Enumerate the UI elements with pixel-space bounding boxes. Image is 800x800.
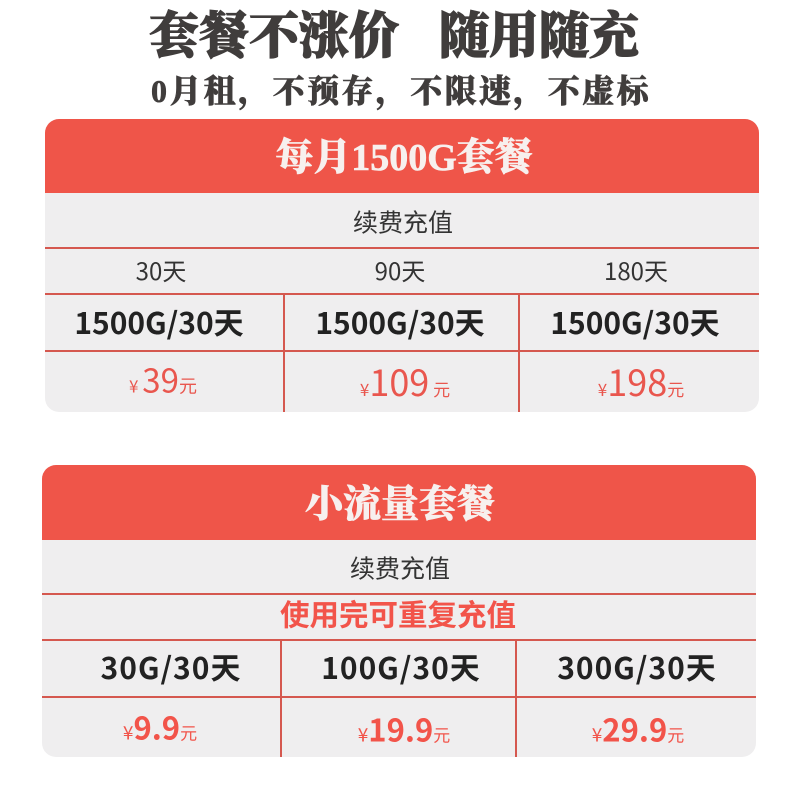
panel: monthly 1500G plan <box>45 119 759 412</box>
title: 套餐不涨价 随用随充 <box>149 8 639 64</box>
price 19.9: ¥19.9元 <box>358 706 450 750</box>
duration: 180 days: 180天 <box>604 252 668 287</box>
plan 300G: 300G/30天 <box>557 644 717 688</box>
duration: 90 days: 90天 <box>375 252 425 287</box>
price 39: ¥ 39元 <box>129 354 197 402</box>
plan 3: 1500G/30天 <box>550 299 720 343</box>
panel header <box>45 119 759 193</box>
plan 30G: 30G/30天 <box>101 644 241 688</box>
subtitle: 0月租，不预存，不限速，不虚标 <box>151 73 651 109</box>
duration: 30 days: 30天 <box>136 252 186 287</box>
panel heading: 小流量套餐 <box>305 484 495 526</box>
plan 2: 1500G/30天 <box>315 299 485 343</box>
refill note: 使用完可重复充值 <box>280 592 516 634</box>
renewal label: 续费充值 <box>353 204 453 240</box>
panel heading: 每月1500G套餐 <box>275 137 533 179</box>
price 109: ¥109 元 <box>360 355 450 407</box>
renewal label: 续费充值 <box>350 550 450 586</box>
panel header <box>42 465 756 540</box>
price 198: ¥198元 <box>598 355 684 407</box>
price 9.9: ¥9.9元 <box>123 704 197 748</box>
panel: small data plan <box>42 465 756 757</box>
plan 100G: 100G/30天 <box>321 644 481 688</box>
plan 1: 1500G/30天 <box>74 299 244 343</box>
price 29.9: ¥29.9元 <box>592 706 684 750</box>
